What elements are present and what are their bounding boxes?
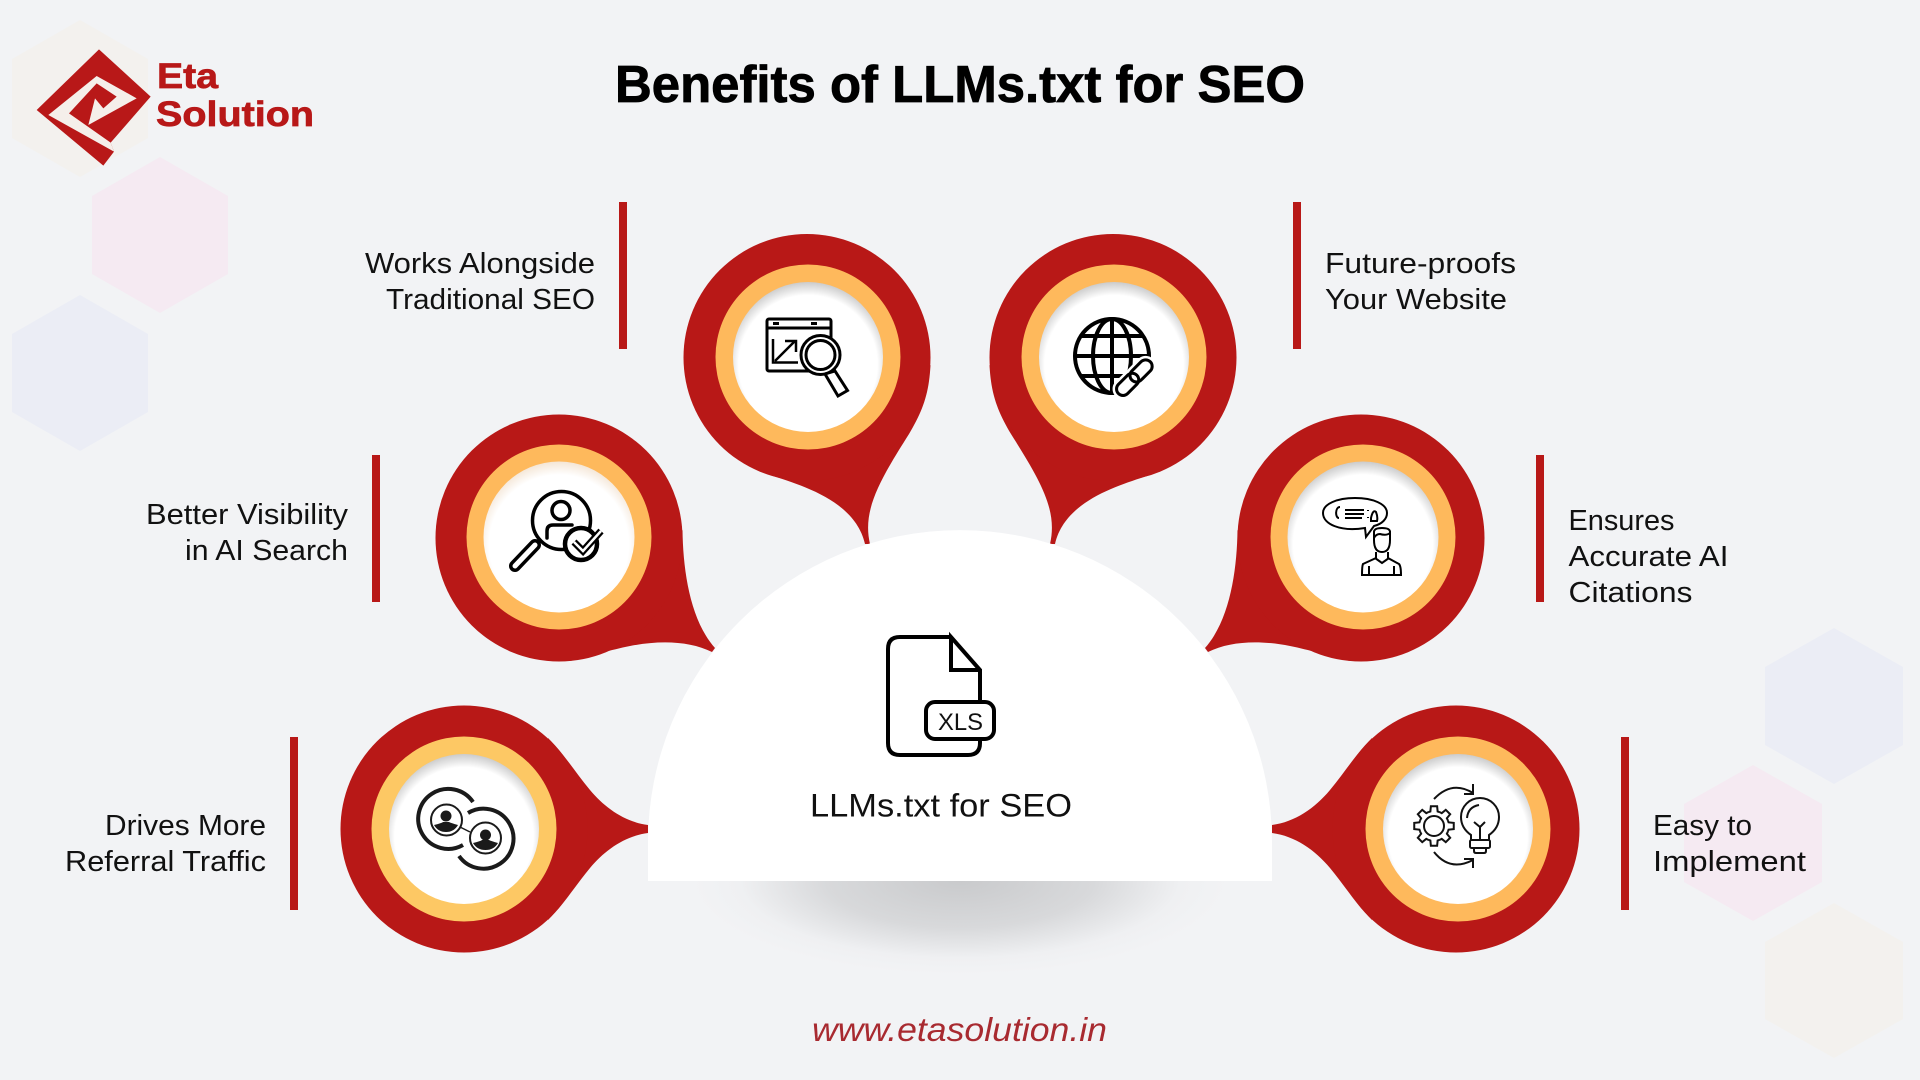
icon: gear and light bulb [1414, 784, 1499, 868]
center semicircle panel [648, 530, 1272, 881]
center base shadow [692, 787, 1228, 975]
icon: two connected users [418, 789, 513, 869]
logo text: Solution [156, 95, 314, 134]
bar and label: future-proofs your website [1293, 202, 1516, 349]
pin: easy to implement [1272, 706, 1580, 952]
bar and label: ensures accurate AI citations: Ensures [1568, 505, 1674, 537]
pin: future-proofs your website [990, 234, 1236, 544]
logo mark [37, 49, 151, 166]
icon: document with XLS badge: XLS [938, 709, 983, 736]
bar and label: ensures accurate AI citations: Accurate AI [1568, 541, 1728, 573]
bar and label: easy to implement [1621, 737, 1806, 910]
bar and label: better visibility in AI search: Better Visibility [146, 499, 349, 531]
icon: person search with check [515, 492, 601, 566]
bar and label: easy to implement: Easy to [1653, 810, 1752, 842]
bar and label: drives more referral traffic [65, 737, 298, 910]
pin: works alongside traditional SEO [684, 234, 930, 544]
bar and label: easy to implement: Implement [1653, 846, 1806, 878]
bar and label: future-proofs your website: Future-proofs [1325, 248, 1516, 280]
bar and label: drives more referral traffic: Referral Traffic [65, 846, 266, 878]
pin: ensures accurate AI citations [1205, 414, 1484, 662]
bar and label: drives more referral traffic: Drives More [105, 810, 266, 842]
icon: globe with link [1075, 319, 1155, 398]
bar and label: works alongside traditional SEO [365, 202, 627, 349]
icon: document with XLS badge [888, 637, 994, 755]
bar and label: ensures accurate AI citations: Citations [1568, 577, 1692, 609]
bar and label: future-proofs your website: Your Website [1325, 284, 1507, 316]
icon: person with speech bubble [1323, 498, 1401, 575]
pin: better visibility in AI search [436, 414, 715, 662]
bar and label: ensures accurate AI citations [1536, 455, 1728, 609]
logo text: Eta [157, 57, 219, 96]
bar and label: better visibility in AI search [146, 455, 380, 602]
logo [37, 49, 314, 166]
bar and label: works alongside traditional SEO: Works Alongside [365, 248, 595, 280]
footer website url: www.etasolution.in [812, 1011, 1107, 1048]
icon: browser with magnifier [767, 319, 848, 396]
bar and label: works alongside traditional SEO: Traditional SEO [386, 284, 595, 316]
bar and label: better visibility in AI search: in AI Search [185, 535, 348, 567]
title: Benefits of LLMs.txt for SEO [615, 56, 1305, 114]
logo text [156, 57, 314, 134]
pin: drives more referral traffic [340, 706, 648, 952]
center label: LLMs.txt for SEO [810, 788, 1072, 824]
